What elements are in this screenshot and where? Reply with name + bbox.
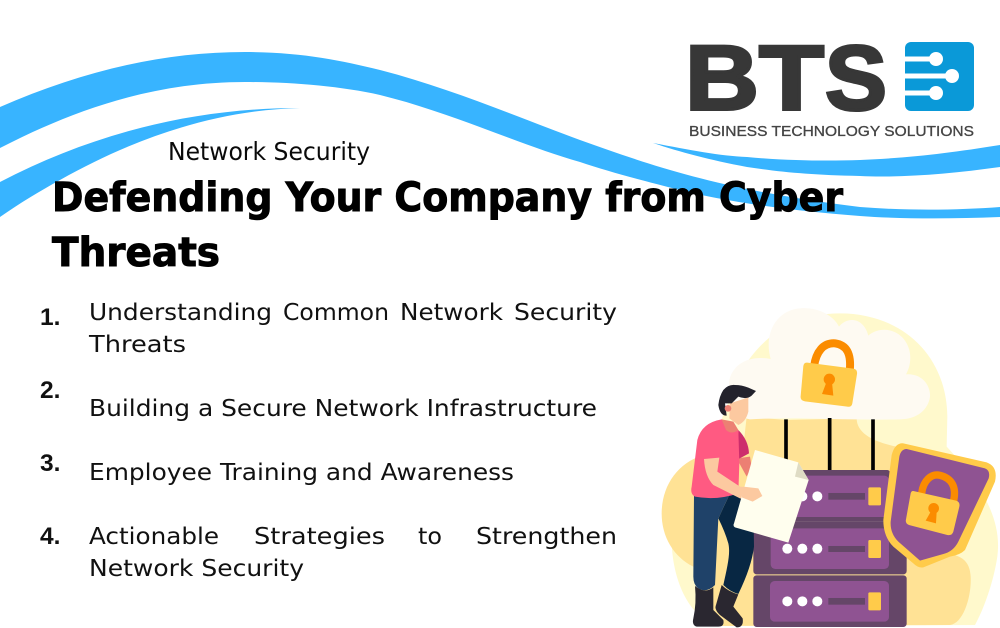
item 1: Common <box>283 298 389 326</box>
item 3 <box>40 450 514 486</box>
item 2: Building a Secure Network Infrastructure <box>89 394 597 422</box>
server rack <box>753 470 907 627</box>
logo <box>685 28 974 140</box>
item 1: Understanding <box>89 298 272 326</box>
item 4: Strengthen <box>476 522 617 550</box>
front arm <box>704 458 762 502</box>
sleeve shade <box>737 430 749 460</box>
torso <box>691 419 739 498</box>
title: Threats <box>52 230 220 276</box>
title: Defending Your Company from Cyber <box>52 175 843 221</box>
cloud cables <box>786 418 873 472</box>
background blobs <box>662 313 998 626</box>
logo wordmark: T <box>759 28 824 130</box>
background swoosh: right wave <box>653 143 1000 177</box>
item 4: to <box>418 522 442 550</box>
item 3: Employee Training and Awareness <box>89 458 514 486</box>
back arm <box>737 457 752 477</box>
padlock: cloud <box>801 343 857 407</box>
illustration: person with secure servers <box>662 308 998 627</box>
numbered list <box>40 298 617 582</box>
logo icon <box>903 42 974 111</box>
boots <box>693 586 724 627</box>
logo wordmark <box>685 28 887 130</box>
item 2 <box>40 377 597 422</box>
hand over document <box>742 487 762 502</box>
item 1: Threats <box>88 330 186 358</box>
shield <box>883 443 996 567</box>
logo wordmark: S <box>825 28 887 130</box>
item 1 <box>40 298 617 358</box>
back leg <box>718 493 754 594</box>
logo wordmark: B <box>685 28 759 130</box>
background swoosh: long upper wave <box>0 52 1000 218</box>
item 1: 1. <box>40 304 60 331</box>
collar <box>722 419 738 432</box>
neck and face <box>729 397 748 425</box>
item 4: Network Security <box>89 554 304 582</box>
person <box>691 385 762 627</box>
document <box>734 450 809 543</box>
item 1: Network <box>400 298 503 326</box>
item 4: Strategies <box>254 522 385 550</box>
ear <box>725 405 731 412</box>
logo tagline: BUSINESS TECHNOLOGY SOLUTIONS <box>689 124 974 140</box>
hair <box>718 385 756 416</box>
item 4: 4. <box>40 523 60 550</box>
cloud <box>729 308 930 420</box>
background swoosh: lower left wave <box>0 108 300 217</box>
subtitle: Network Security <box>168 137 370 166</box>
item 1: Security <box>514 298 617 326</box>
item 4 <box>40 522 617 582</box>
item 4: Actionable <box>89 522 219 550</box>
item 2: 2. <box>40 377 60 404</box>
front leg <box>693 493 730 590</box>
title <box>52 175 843 276</box>
item 3: 3. <box>40 450 60 477</box>
